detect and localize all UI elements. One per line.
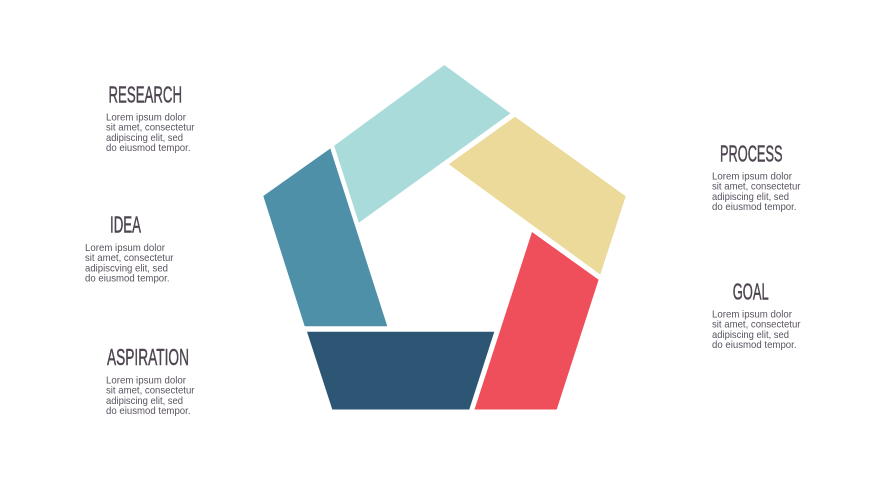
heading: goal: GOAL xyxy=(733,278,769,304)
body: goal: sit amet, consectetur xyxy=(712,320,801,331)
segment: teal blue (idea) xyxy=(263,148,387,326)
body: idea: adipiscving elit, sed xyxy=(85,263,168,274)
body: process xyxy=(712,172,801,213)
body: goal xyxy=(712,310,801,351)
body: goal: do eiusmod tempor. xyxy=(712,340,796,351)
heading: process: PROCESS xyxy=(720,140,782,166)
body: process: sit amet, consectetur xyxy=(712,182,801,193)
text block: aspiration xyxy=(106,344,195,417)
body: process: do eiusmod tempor. xyxy=(712,202,796,213)
body: goal: adipiscing elit, sed xyxy=(712,330,789,341)
heading: aspiration: ASPIRATION xyxy=(107,344,189,370)
text block: goal xyxy=(712,278,801,351)
body: aspiration: Lorem ipsum dolor xyxy=(106,376,187,386)
body: idea: do eiusmod tempor. xyxy=(85,274,170,284)
body: research: do eiusmod tempor. xyxy=(106,143,190,154)
body: aspiration xyxy=(106,376,195,417)
body: aspiration: do eiusmod tempor. xyxy=(106,406,190,417)
body: research: Lorem ipsum dolor xyxy=(106,112,187,124)
segment: light aqua (research) xyxy=(334,65,510,223)
heading: research: RESEARCH xyxy=(108,82,182,108)
body: research: adipiscing elit, sed xyxy=(106,133,183,144)
body: idea xyxy=(85,243,174,284)
segment: coral red (goal) xyxy=(474,232,599,410)
text block: idea xyxy=(85,212,174,284)
body: research: sit amet, consectetur xyxy=(106,123,195,134)
segment: sand yellow (process) xyxy=(449,117,626,274)
text block: research xyxy=(106,82,195,154)
body: process: Lorem ipsum dolor xyxy=(712,172,793,182)
segment: navy (aspiration) xyxy=(307,332,494,410)
pentagon diagram xyxy=(263,65,626,410)
heading: idea: IDEA xyxy=(110,212,141,238)
body: idea: Lorem ipsum dolor xyxy=(85,243,166,254)
body: aspiration: adipiscing elit, sed xyxy=(106,396,183,407)
body: research xyxy=(106,112,195,154)
text block: process xyxy=(712,140,801,213)
body: goal: Lorem ipsum dolor xyxy=(712,310,793,320)
body: idea: sit amet, consectetur xyxy=(85,253,174,264)
body: aspiration: sit amet, consectetur xyxy=(106,386,195,397)
body: process: adipiscing elit, sed xyxy=(712,192,789,203)
